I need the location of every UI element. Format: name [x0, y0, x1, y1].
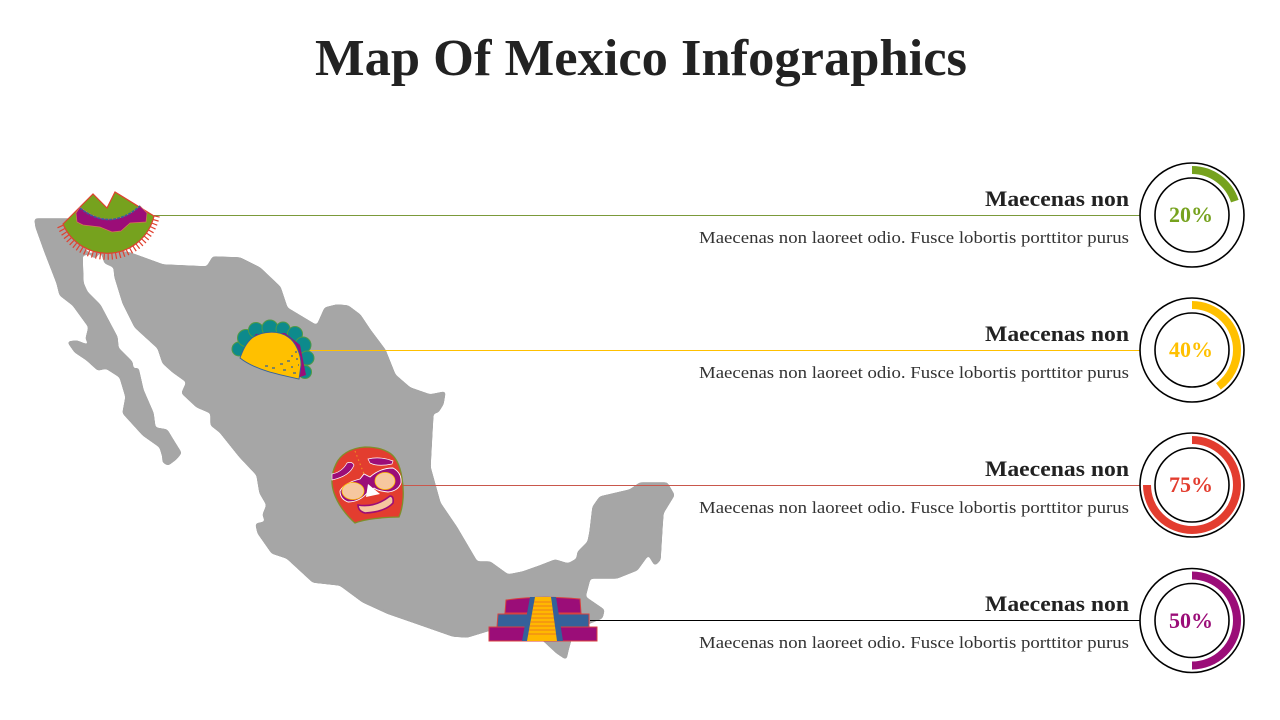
row 3: text block [699, 456, 1130, 517]
icon: sombrero [60, 192, 157, 257]
gauge: 50%: 50% [1169, 608, 1213, 633]
row 1: connector line [154, 214, 1140, 216]
row 2: connector line [310, 350, 1140, 352]
row 3: text block: Maecenas non [985, 456, 1130, 481]
gauge: 20%: 20% [1169, 202, 1213, 227]
gauge: 75%: 75% [1169, 472, 1213, 497]
gauge: 40% [1140, 298, 1244, 402]
icon: wrestling mask [332, 447, 403, 523]
row 1: text block: Maecenas non [985, 186, 1130, 211]
row 4: text block: Maecenas non [985, 591, 1130, 616]
Baja California peninsula [35, 219, 181, 465]
gauge: 75% [1140, 433, 1244, 537]
row 4: text block [699, 591, 1130, 652]
row 2: text block: Maecenas non laoreet odio. Fusce lobortis porttitor purus [699, 363, 1129, 382]
gauge: 50% [1140, 568, 1244, 672]
icon: taco [232, 320, 314, 379]
gauge: 40%: 40% [1169, 337, 1213, 362]
row 2: text block [699, 321, 1130, 382]
gauge: 20% [1140, 163, 1244, 267]
row 3: text block: Maecenas non laoreet odio. Fusce lobortis porttitor purus [699, 498, 1129, 517]
row 1: text block: Maecenas non laoreet odio. Fusce lobortis porttitor purus [699, 228, 1129, 247]
row 1: text block [699, 186, 1130, 247]
row 4: text block: Maecenas non laoreet odio. Fusce lobortis porttitor purus [699, 633, 1129, 652]
row 4: connector line [590, 620, 1140, 622]
title: Map Of Mexico Infographics [315, 30, 967, 87]
map of Mexico [35, 219, 674, 659]
mainland Mexico [100, 248, 674, 659]
row 2: text block: Maecenas non [985, 321, 1130, 346]
row 3: connector line [403, 484, 1140, 486]
icon: pyramid [489, 597, 597, 641]
